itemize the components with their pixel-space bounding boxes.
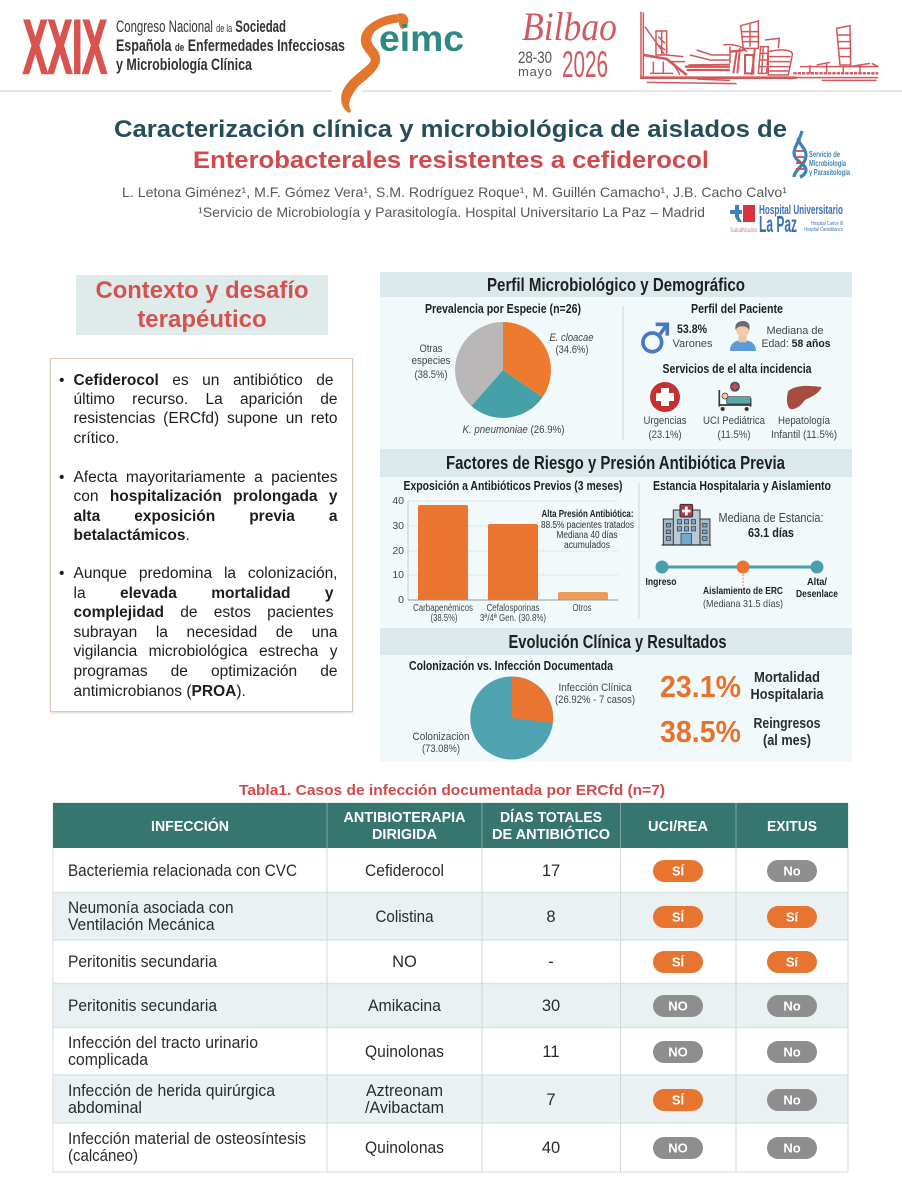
bar chart: antibiotics: 20: [392, 545, 404, 557]
row 3: Sí: [786, 954, 799, 970]
SEIMC logo: eimc: [379, 18, 464, 59]
venue and date: Bilbao: [522, 4, 617, 49]
bullet 2: Afecta mayoritariamente a pacientes: [74, 469, 338, 486]
section: Perfil Microbiológico y Demográfico: [380, 272, 852, 441]
table header: DIRIGIDA: [372, 827, 438, 843]
pie chart: species: [455, 322, 551, 418]
venue and date: [518, 4, 617, 85]
bar chart: antibiotics: Carbapenémicos: [413, 603, 473, 614]
bar chart: antibiotics: (38.5%): [430, 613, 458, 624]
row 1: Bacteriemia relacionada con CVC: [68, 862, 297, 880]
affiliation: ¹Servicio de Microbiología y Parasitología. Hospital Universitario La Paz – Madrid: [198, 204, 705, 220]
section: Factores de Riesgo y Presión Antibiótica Previa: [380, 449, 852, 624]
timeline: [646, 560, 838, 610]
stat: mortality: Hospitalaria: [750, 686, 824, 703]
row 5: Quinolonas: [365, 1043, 444, 1061]
bar chart: antibiotics: [392, 495, 618, 624]
row 1: SÍ: [672, 864, 685, 878]
stat: mortality: 23.1%: [660, 669, 741, 704]
bar chart: antibiotics: 10: [392, 569, 404, 581]
bullet 3: complejidad de estos pacientes: [74, 604, 334, 621]
bullet 2: alta exposición previa a: [74, 508, 338, 525]
row 7: Quinolonas: [365, 1139, 444, 1157]
callout: high antibiotic pressure: acumulados: [564, 540, 610, 551]
stat: median age: Edad: 58 años: [762, 338, 830, 350]
pie labels: (38.5%): [414, 369, 448, 381]
row 6: Aztreonam: [366, 1082, 443, 1100]
congress name: [116, 17, 345, 74]
service labels: (11.5%): [718, 429, 750, 441]
pie labels: K. pneumoniae (26.9%): [462, 424, 564, 436]
subheading: colonization vs infection: Colonización vs. Infección Documentada: [409, 658, 614, 673]
row 7: [68, 1130, 817, 1165]
table title: Tabla1. Casos de infección documentada por ERCfd (n=7): [239, 782, 665, 799]
pie labels: Infección Clínica: [558, 682, 632, 694]
section heading: Perfil Microbiológico y Demográfico: [487, 275, 745, 295]
row 1: Cefiderocol: [365, 862, 444, 880]
row 6: SÍ: [672, 1092, 685, 1108]
table header: [53, 803, 848, 848]
row 3: SÍ: [672, 954, 685, 970]
service labels: [644, 415, 837, 441]
section heading: [380, 449, 852, 477]
row 4: [68, 995, 817, 1017]
service labels: Infantil (11.5%): [771, 429, 837, 441]
title: Caracterización clínica y microbiológica de aislados de: [114, 116, 787, 143]
logo: Servicio de Microbiología y Parasitología: Microbiología: [809, 158, 846, 168]
bullet 3: antimicrobianos (PROA).: [74, 683, 246, 700]
pie labels: Colonización: [412, 731, 470, 743]
subheading: services: Servicios de el alta incidencia: [662, 361, 812, 376]
table header: EXITUS: [767, 819, 817, 835]
pie labels: Otras: [420, 343, 443, 355]
timeline: Alta/: [807, 576, 827, 588]
bullet 3: Aunque predomina la colonización,: [74, 565, 338, 582]
stat: readmissions: [660, 714, 820, 749]
congress name: Española de Enfermedades Infecciosas: [116, 36, 345, 55]
table header: INFECCIÓN: [151, 817, 229, 835]
pie labels: (34.6%): [556, 344, 588, 356]
callout: high antibiotic pressure: [541, 509, 634, 551]
stat: male patients: [672, 322, 713, 350]
stat: median age: [762, 325, 830, 350]
title: Enterobacterales resistentes a cefiderocol: [193, 147, 709, 174]
pie labels: (73.08%): [422, 743, 460, 755]
row 7: No: [783, 1140, 801, 1156]
subheading: prevalence: Prevalencia por Especie (n=26): [425, 301, 581, 316]
bullet 3: programas de optimización de: [74, 663, 338, 680]
stat: median stay: 63.1 días: [748, 525, 794, 540]
bar chart: antibiotics: 0: [398, 594, 404, 606]
service labels: (23.1%): [648, 429, 682, 441]
bullet 1: crítico.: [74, 430, 119, 447]
row 2: Ventilación Mecánica: [68, 916, 215, 934]
row 6: Infección de herida quirúrgica: [68, 1082, 276, 1100]
bullet 1: resistencias (ERCfd) supone un reto: [74, 410, 338, 427]
icon: hospital bed: [719, 382, 751, 411]
stat: mortality: Mortalidad: [754, 669, 820, 686]
panel: context text: [50, 358, 353, 712]
row 1: No: [783, 864, 801, 878]
row 3: [68, 951, 817, 973]
logo: Hospital Universitario La Paz: [730, 203, 843, 237]
row 5: Infección del tracto urinario: [68, 1034, 258, 1052]
vertical divider: [622, 306, 624, 440]
row 4: 30: [542, 997, 560, 1015]
text: XXIX: [23, 5, 107, 90]
row backgrounds: [53, 803, 848, 1172]
row 4: Peritonitis secundaria: [68, 997, 218, 1015]
row 6: No: [783, 1092, 801, 1108]
row 6: 7: [546, 1091, 556, 1109]
panel: results background: [380, 272, 852, 762]
bar chart: antibiotics: Otros: [572, 603, 592, 614]
icon: patient: [730, 321, 756, 351]
row 5: NO: [668, 1044, 688, 1060]
section: Evolución Clínica y Resultados: [380, 628, 852, 760]
stat: readmissions: 38.5%: [660, 714, 741, 749]
icon: hospital building: [662, 504, 711, 545]
venue and date: 2026: [562, 44, 608, 85]
icon: male symbol: [643, 324, 667, 352]
row 4: Amikacina: [368, 997, 442, 1015]
bullet 1: último recurso. La aparición de: [74, 391, 338, 408]
bar chart: antibiotics: Cefalosporinas: [486, 603, 540, 614]
pie labels: [412, 332, 594, 436]
row 2: Sí: [786, 910, 799, 924]
timeline: Desenlace: [796, 588, 838, 600]
subheading: patient profile: Perfil del Paciente: [691, 301, 783, 316]
row 6: abdominal: [68, 1099, 142, 1117]
timeline: Aislamiento de ERC: [703, 585, 783, 597]
row 3: Peritonitis secundaria: [68, 953, 218, 971]
row 2: 8: [546, 908, 556, 926]
venue and date: 28-30: [518, 48, 552, 67]
row 5: 11: [542, 1043, 560, 1061]
SEIMC logo: [342, 14, 464, 112]
stat: mortality: [660, 669, 824, 704]
row 1: [68, 860, 817, 882]
title: [114, 116, 787, 174]
logo: Hospital Universitario La Paz: SaludMadrid: [730, 228, 757, 234]
logo: Servicio de Microbiología y Parasitología: Servicio de: [809, 149, 840, 159]
callout: high antibiotic pressure: Mediana 40 días: [556, 530, 618, 541]
row 1: 17: [542, 862, 560, 880]
bullet 3: la elevada mortalidad y: [74, 585, 334, 602]
bullet 2: •: [59, 469, 64, 486]
callout: high antibiotic pressure: 88.5% pacientes tratados: [541, 520, 634, 531]
row 7: NO: [668, 1140, 688, 1156]
row 6: [68, 1082, 817, 1117]
logo: Servicio de Microbiología y Parasitología: [794, 131, 850, 177]
logo: Hospital Universitario La Paz: Hospital Universitario: [759, 203, 843, 217]
pie labels: E. cloacae: [550, 332, 594, 344]
section heading: [380, 272, 852, 297]
bullet 1: •: [59, 372, 64, 389]
stat: median age: Mediana de: [766, 325, 824, 337]
bullet 1: [59, 372, 338, 447]
logo: Hospital Universitario La Paz: Hospital Carlos III: [811, 221, 843, 227]
timeline: Ingreso: [646, 576, 676, 588]
row 5: complicada: [68, 1051, 149, 1069]
service labels: UCI Pediátrica: [703, 415, 766, 427]
pie labels: (26.92% - 7 casos): [555, 694, 635, 706]
subheading: hospital stay: Estancia Hospitalaria y Aislamiento: [653, 478, 831, 493]
bullet 2: con hospitalización prolongada y: [74, 488, 338, 505]
vertical divider: [638, 483, 640, 619]
panel heading: Contexto y desafío terapéutico: Contexto y desafío: [96, 277, 308, 304]
section heading: Evolución Clínica y Resultados: [508, 632, 726, 652]
row 5: [68, 1034, 817, 1069]
header divider: [0, 90, 902, 92]
stat: male patients: 53.8%: [677, 322, 707, 336]
panel heading: Contexto y desafío terapéutico: terapéutico: [137, 306, 267, 333]
table header: ANTIBIOTERAPIA: [344, 810, 466, 826]
row 3: -: [548, 953, 554, 971]
service labels: Urgencias: [644, 415, 687, 427]
row 7: (calcáneo): [68, 1147, 138, 1165]
pie labels: especies: [412, 355, 451, 367]
icon: liver: [787, 386, 822, 409]
bullet 2: [59, 469, 338, 544]
row 2: Neumonía asociada con: [68, 899, 234, 917]
stat: median stay: [718, 510, 824, 540]
table header: DÍAS TOTALES: [500, 809, 602, 826]
logo: Hospital Universitario La Paz: Hospital Cantoblanco: [804, 227, 843, 233]
bullet 3: subrayan la necesidad de una: [74, 624, 338, 641]
row 2: SÍ: [672, 910, 685, 924]
row 3: NO: [392, 953, 417, 971]
pie labels: [412, 682, 635, 755]
bar chart: antibiotics: 3ª/4ª Gen. (30.8%): [480, 613, 546, 624]
callout: high antibiotic pressure: Alta Presión Antibiótica:: [542, 509, 634, 520]
stat: male patients: Varones: [672, 338, 713, 350]
bullet 3: •: [59, 565, 64, 582]
row 2: [68, 899, 817, 934]
icon: emergency cross: [650, 382, 680, 412]
stat: median stay: Mediana de Estancia:: [718, 510, 824, 525]
subheading: antibiotic exposure: Exposición a Antibióticos Previos (3 meses): [404, 478, 622, 493]
section heading: [380, 628, 852, 655]
row 4: NO: [668, 998, 688, 1014]
table: documented infection cases: [53, 803, 848, 1172]
bullet 3: vigilancia microbiológica estrecha y: [74, 643, 338, 660]
row 5: No: [783, 1044, 801, 1060]
bar chart: antibiotics: 30: [392, 520, 404, 532]
row 7: 40: [542, 1139, 560, 1157]
service labels: Hepatología: [778, 415, 831, 427]
authors: L. Letona Giménez¹, M.F. Gómez Vera¹, S.M. Rodríguez Roque¹, M. Guillén Camacho¹, J.B. Cacho Calvo¹: [122, 184, 787, 200]
stat: readmissions: Reingresos: [754, 715, 820, 732]
bullet 2: betalactámicos.: [74, 527, 190, 544]
stat: readmissions: (al mes): [763, 732, 811, 749]
bar chart: antibiotics: 40: [392, 495, 404, 507]
congress name: Congreso Nacional de la Sociedad: [116, 17, 286, 36]
table header: UCI/REA: [648, 819, 709, 835]
bullet 1: Cefiderocol es un antibiótico de: [74, 372, 334, 389]
venue and date: mayo: [518, 64, 552, 79]
timeline: (Mediana 31.5 días): [703, 598, 783, 610]
logo: Servicio de Microbiología y Parasitología: y Parasitología: [809, 167, 850, 177]
section heading: Factores de Riesgo y Presión Antibiótica Previa: [446, 453, 786, 473]
table header: DE ANTIBIÓTICO: [492, 825, 610, 843]
row 4: No: [783, 998, 801, 1014]
row 2: Colistina: [376, 908, 434, 926]
row 6: /Avibactam: [365, 1099, 444, 1117]
logo: Hospital Universitario La Paz: La Paz: [759, 211, 797, 237]
congress name: y Microbiología Clínica: [116, 55, 252, 74]
pie chart: colonization vs infection: [470, 676, 553, 760]
panel heading: Contexto y desafío terapéutico: [76, 275, 328, 335]
bullet 3: [59, 565, 338, 700]
row 7: Infección material de osteosíntesis: [68, 1130, 306, 1148]
Bilbao skyline drawing: [640, 12, 878, 84]
